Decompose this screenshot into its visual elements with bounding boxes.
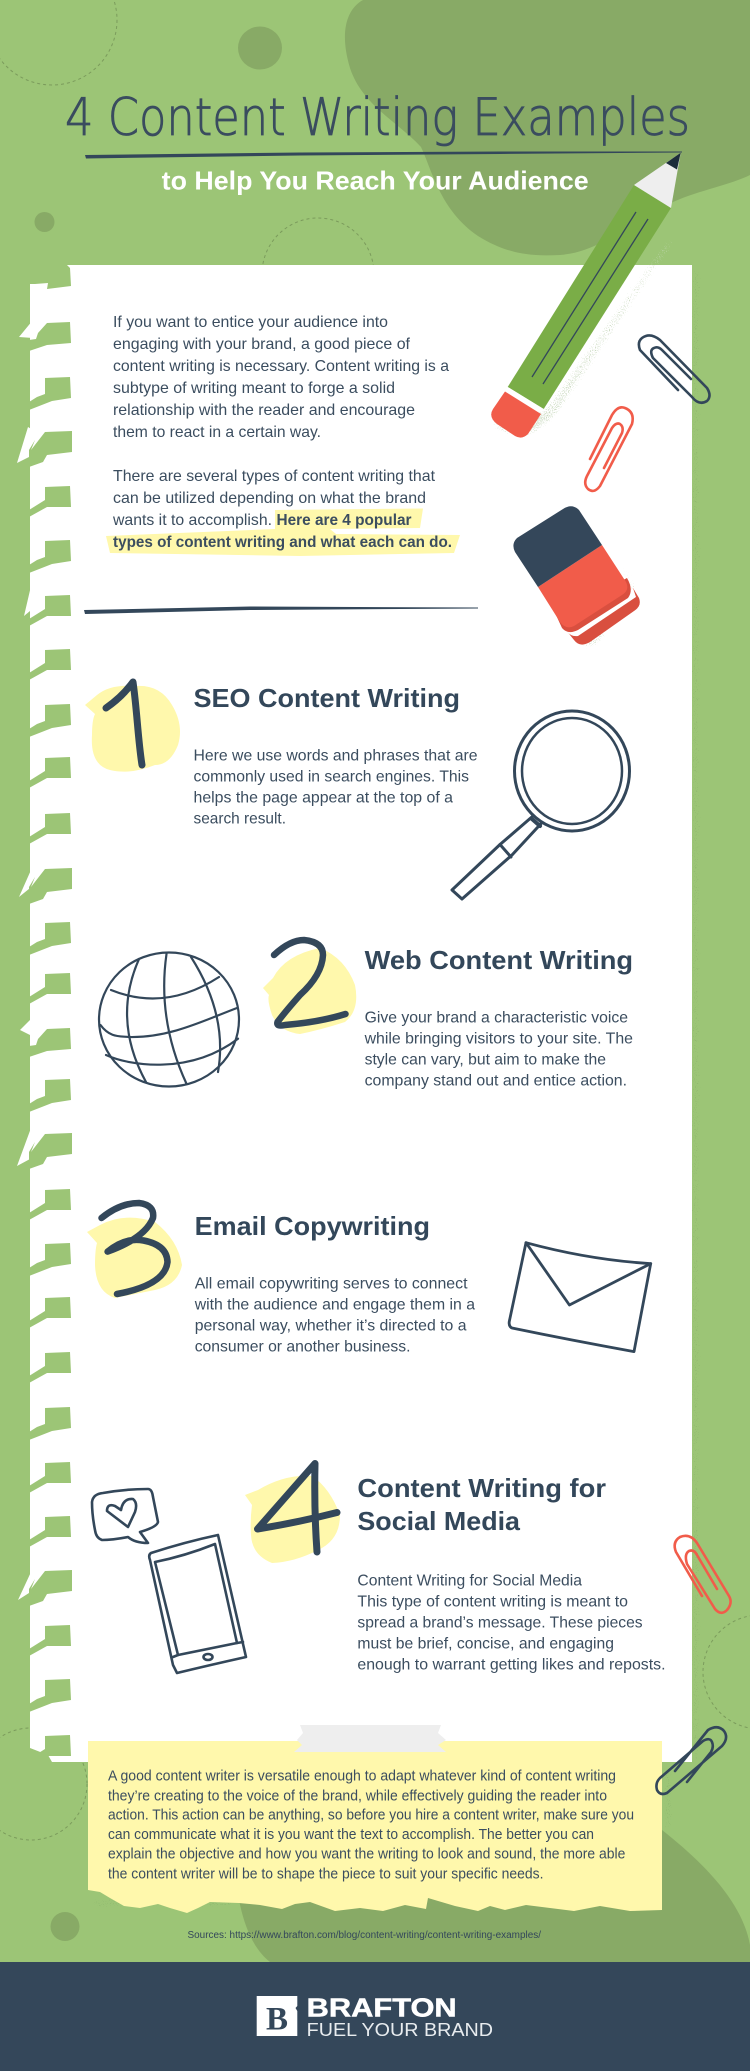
- background blob: bottom right: [239, 1830, 750, 1962]
- body: personal way, whether it’s directed to a: [195, 1318, 467, 1335]
- intro text: engaging with your brand, a good piece of: [113, 336, 411, 353]
- section 3: Email Copywriting: [87, 1203, 651, 1356]
- section 2: Web Content Writing: [99, 940, 633, 1090]
- icon: speech bubble with heart: [92, 1489, 158, 1543]
- title underline: [85, 152, 682, 158]
- body: company stand out and entice action.: [365, 1073, 627, 1090]
- note text: can communicate what it is you want the text to accomplish. The better you can: [108, 1827, 594, 1843]
- body: [194, 1276, 475, 1356]
- intro text: If you want to entice your audience into: [113, 314, 388, 331]
- section 1: SEO Content Writing: [85, 682, 630, 899]
- notebook paper: [17, 265, 692, 1766]
- icon: red paper clip on right edge: [675, 1536, 731, 1613]
- icon: navy paper clip on note: [656, 1727, 726, 1794]
- logo wordmark: FUEL YOUR BRAND: [307, 2019, 493, 2040]
- note text: they’re creating to the voice of the brand, while effectively guiding the reader into: [108, 1789, 607, 1805]
- background blob: top right: [345, 0, 750, 255]
- highlighted text: [113, 512, 452, 551]
- icon: smartphone: [149, 1535, 246, 1673]
- section 4: Content Writing for Social Media: [92, 1464, 666, 1674]
- body: Here we use words and phrases that are: [194, 748, 478, 764]
- highlighted text: types of content writing and what each can do.: [113, 534, 452, 551]
- intro text: can be utilized depending on what the brand: [113, 490, 426, 507]
- sources: Sources: https://www.brafton.com/blog/content-writing/content-writing-examples/: [188, 1930, 541, 1941]
- body: Give your brand a characteristic voice: [365, 1010, 628, 1027]
- note text: [108, 1768, 634, 1882]
- icon: globe: [99, 952, 239, 1086]
- highlighted text: Here are 4 popular: [276, 512, 412, 529]
- body: style can vary, but aim to make the: [365, 1052, 606, 1069]
- intro text: There are several types of content writing that: [113, 468, 436, 485]
- body: search result.: [194, 810, 286, 828]
- icon: red paper clip: [585, 407, 633, 491]
- heading: SEO Content Writing: [194, 683, 460, 713]
- icon: magnifying glass: [452, 711, 630, 899]
- body: spread a brand’s message. These pieces: [357, 1615, 643, 1632]
- logo wordmark: [307, 1995, 493, 2040]
- yellow summary note: [88, 1725, 662, 1913]
- tape: [294, 1725, 446, 1752]
- body: All email copywriting serves to connect: [195, 1276, 468, 1293]
- heading: Email Copywriting: [195, 1211, 430, 1241]
- note text: action. This action can be anything, so before you hire a content writer, make sure you: [108, 1808, 634, 1824]
- body: commonly used in search engines. This: [194, 768, 469, 786]
- number 2 badge: [263, 940, 356, 1034]
- logo mark: [257, 1996, 297, 2038]
- body: [194, 748, 478, 828]
- logo mark: B: [266, 2002, 288, 2038]
- icon: pencil: [486, 153, 681, 440]
- body: This type of content writing is meant to: [357, 1594, 628, 1611]
- body: consumer or another business.: [195, 1339, 410, 1356]
- intro text: content writing is necessary. Content writing is a: [113, 358, 449, 375]
- icon: navy paper clip top: [639, 335, 710, 403]
- body: [364, 1010, 633, 1090]
- body: helps the page appear at the top of a: [194, 790, 453, 806]
- intro text: [106, 314, 460, 556]
- highlight: [106, 508, 460, 556]
- heading: Content Writing for: [357, 1473, 606, 1503]
- body: enough to warrant getting likes and reposts.: [357, 1657, 666, 1674]
- logo wordmark: BRAFTON: [307, 1995, 457, 2023]
- body: with the audience and engage them in a: [194, 1297, 475, 1314]
- body: Content Writing for Social Media: [357, 1573, 582, 1590]
- icon: envelope: [509, 1243, 651, 1352]
- body: while bringing visitors to your site. The: [364, 1031, 633, 1048]
- body: [357, 1573, 666, 1674]
- intro text: wants it to accomplish.: [112, 512, 272, 529]
- note text: A good content writer is versatile enough to adapt whatever kind of content writing: [108, 1768, 616, 1784]
- number 4 badge: [245, 1464, 340, 1563]
- intro text: them to react in a certain way.: [113, 424, 321, 441]
- note text: explain the objective and how you want the writing to look and sound, the more able: [108, 1846, 625, 1862]
- icon: eraser: [513, 506, 642, 650]
- footer band: [0, 1962, 750, 2071]
- subtitle: to Help You Reach Your Audience: [162, 166, 589, 196]
- heading: Social Media: [357, 1506, 521, 1536]
- intro text: relationship with the reader and encourage: [113, 402, 415, 419]
- intro text: subtype of writing meant to forge a solid: [113, 380, 395, 397]
- number 3 badge: [87, 1203, 182, 1298]
- note text: the content writer will be to shape the piece to suit your specific needs.: [108, 1866, 544, 1882]
- number 1 badge: [85, 682, 180, 772]
- heading: Web Content Writing: [365, 945, 633, 975]
- heading: [357, 1473, 606, 1536]
- body: must be brief, concise, and engaging: [357, 1636, 614, 1653]
